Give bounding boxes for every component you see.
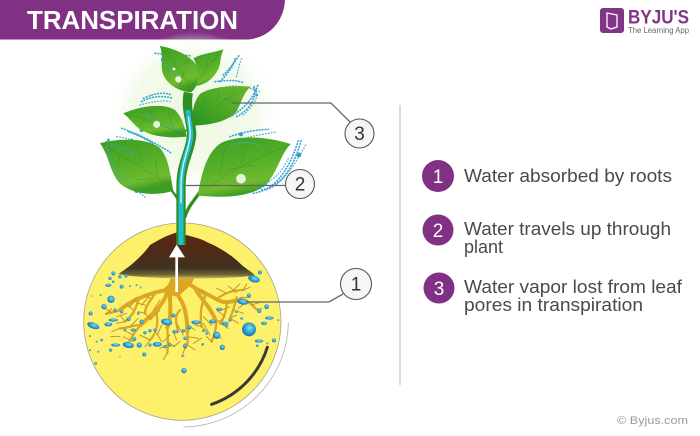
water droplets <box>86 270 279 373</box>
upward arrow <box>169 245 185 292</box>
spray over leaves <box>107 58 270 190</box>
header band with title <box>0 0 285 40</box>
legend item 2: Water travels up through <box>464 219 671 239</box>
soil circle with roots and water <box>84 223 288 427</box>
legend item 3: pores in transpiration <box>464 295 643 315</box>
dew drops <box>153 68 246 183</box>
legend item 2 <box>422 214 671 257</box>
divider <box>400 105 401 385</box>
legend item 3: Water vapor lost from leaf <box>464 277 683 297</box>
legend item 3 <box>424 272 683 315</box>
title: TRANSPIRATION <box>27 7 238 35</box>
leaf: top left <box>160 46 199 92</box>
plant glow <box>106 32 282 192</box>
callout 2 <box>183 170 314 198</box>
leaf: left middle <box>123 106 187 137</box>
callout 3: 3 <box>354 124 365 145</box>
legend item 1 <box>422 160 672 192</box>
leaf: right middle <box>192 86 251 126</box>
leaf: big left <box>100 140 173 194</box>
copyright: © Byjus.com <box>617 415 688 427</box>
callout 3 <box>232 103 374 148</box>
callout 1 <box>247 268 372 302</box>
soil mound <box>118 232 255 278</box>
logo: BYJU'S: BYJU'S <box>628 8 689 28</box>
callout 2: 2 <box>295 174 305 196</box>
logo: BYJU'S: The Learning App <box>628 25 689 35</box>
leaf: big right <box>198 137 291 197</box>
yellow soil disc <box>84 223 281 420</box>
thick dark arc <box>212 347 267 404</box>
plant <box>100 46 307 245</box>
legend item 1: Water absorbed by roots <box>464 166 672 186</box>
legend item 3: 3 <box>434 279 444 300</box>
roots <box>105 278 262 360</box>
outer arc <box>183 323 288 427</box>
leaf: top right <box>193 49 223 86</box>
side branches <box>168 117 203 217</box>
stem <box>181 93 192 245</box>
water vapour spray <box>106 53 307 198</box>
legend item 2: 2 <box>433 221 443 242</box>
legend item 1: 1 <box>433 167 443 188</box>
logo: BYJU'S <box>600 8 689 35</box>
legend item 2: plant <box>464 237 503 257</box>
callout 1: 1 <box>351 274 361 296</box>
